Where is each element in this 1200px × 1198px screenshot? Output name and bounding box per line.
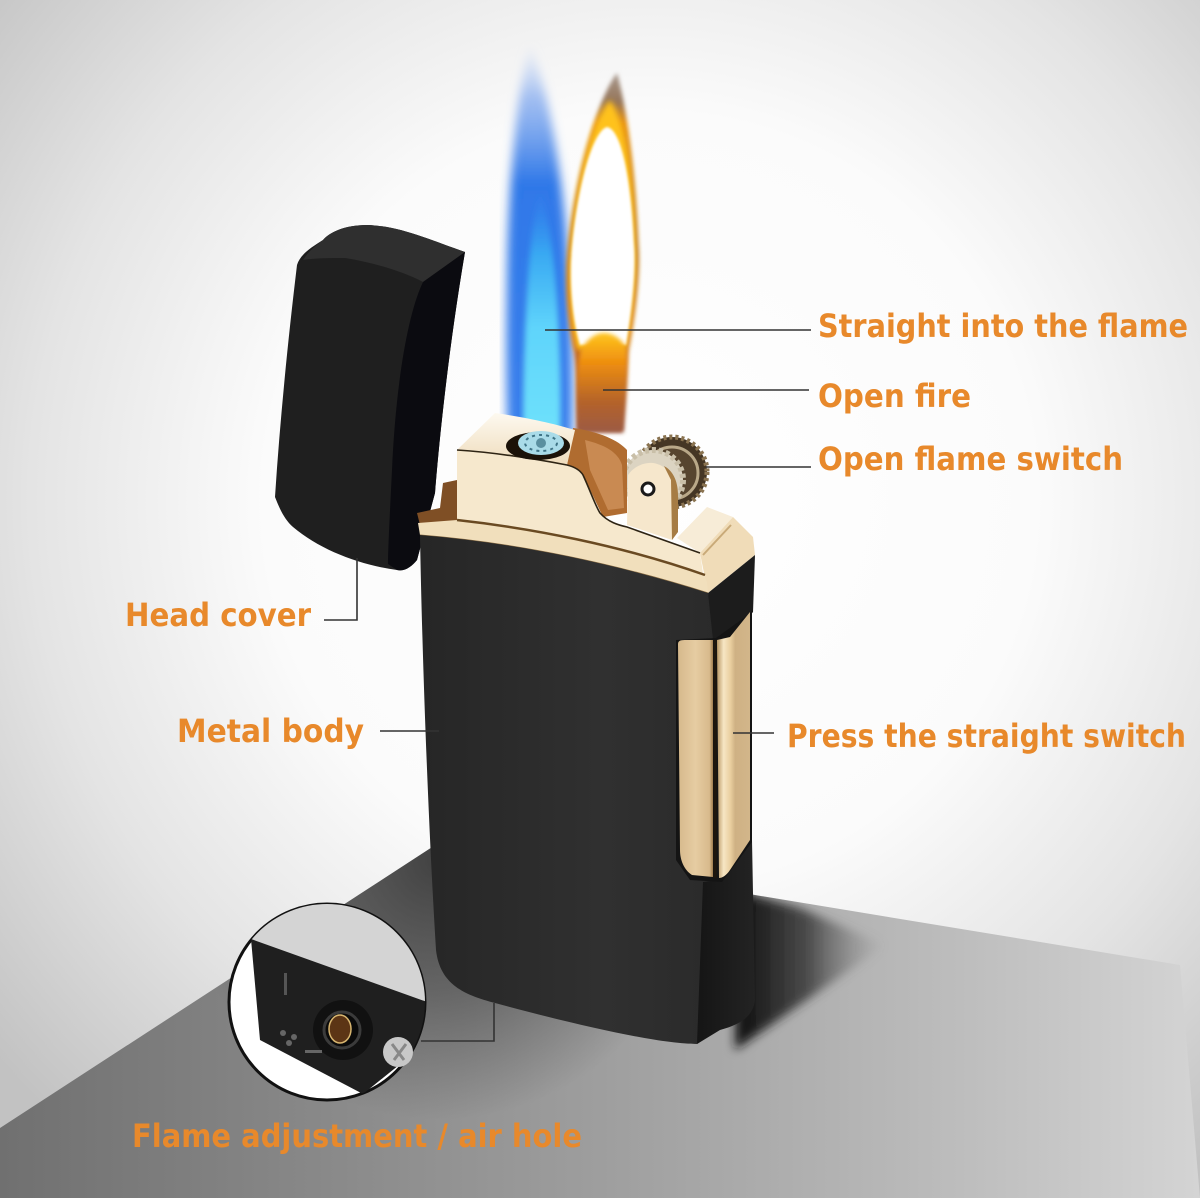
orange flame <box>567 73 639 432</box>
side switch <box>678 612 750 878</box>
burner <box>506 431 570 460</box>
wheel <box>623 437 707 510</box>
table surface <box>0 842 1200 1198</box>
body top strip <box>418 520 708 593</box>
front face <box>457 450 703 573</box>
label: Head cover: Head cover <box>125 596 311 634</box>
lighter body <box>420 535 755 1044</box>
right bevel <box>700 517 755 593</box>
label: Metal body: Metal body <box>177 712 364 750</box>
lid / head cover <box>275 225 465 570</box>
inner copper <box>567 428 627 517</box>
label: Open flame switch: Open flame switch <box>818 440 1123 478</box>
top face <box>457 413 575 465</box>
inset: flame adjustment detail <box>229 900 430 1100</box>
leader lines <box>324 330 811 1041</box>
flames <box>506 45 639 440</box>
label: Open fire: Open fire <box>818 377 971 415</box>
label: Flame adjustment / air hole: Flame adjustment / air hole <box>132 1117 582 1155</box>
deck <box>677 507 733 553</box>
blue flame <box>506 45 573 440</box>
lighter head <box>417 413 755 593</box>
hinge <box>417 480 458 525</box>
wheel bracket <box>627 463 678 540</box>
